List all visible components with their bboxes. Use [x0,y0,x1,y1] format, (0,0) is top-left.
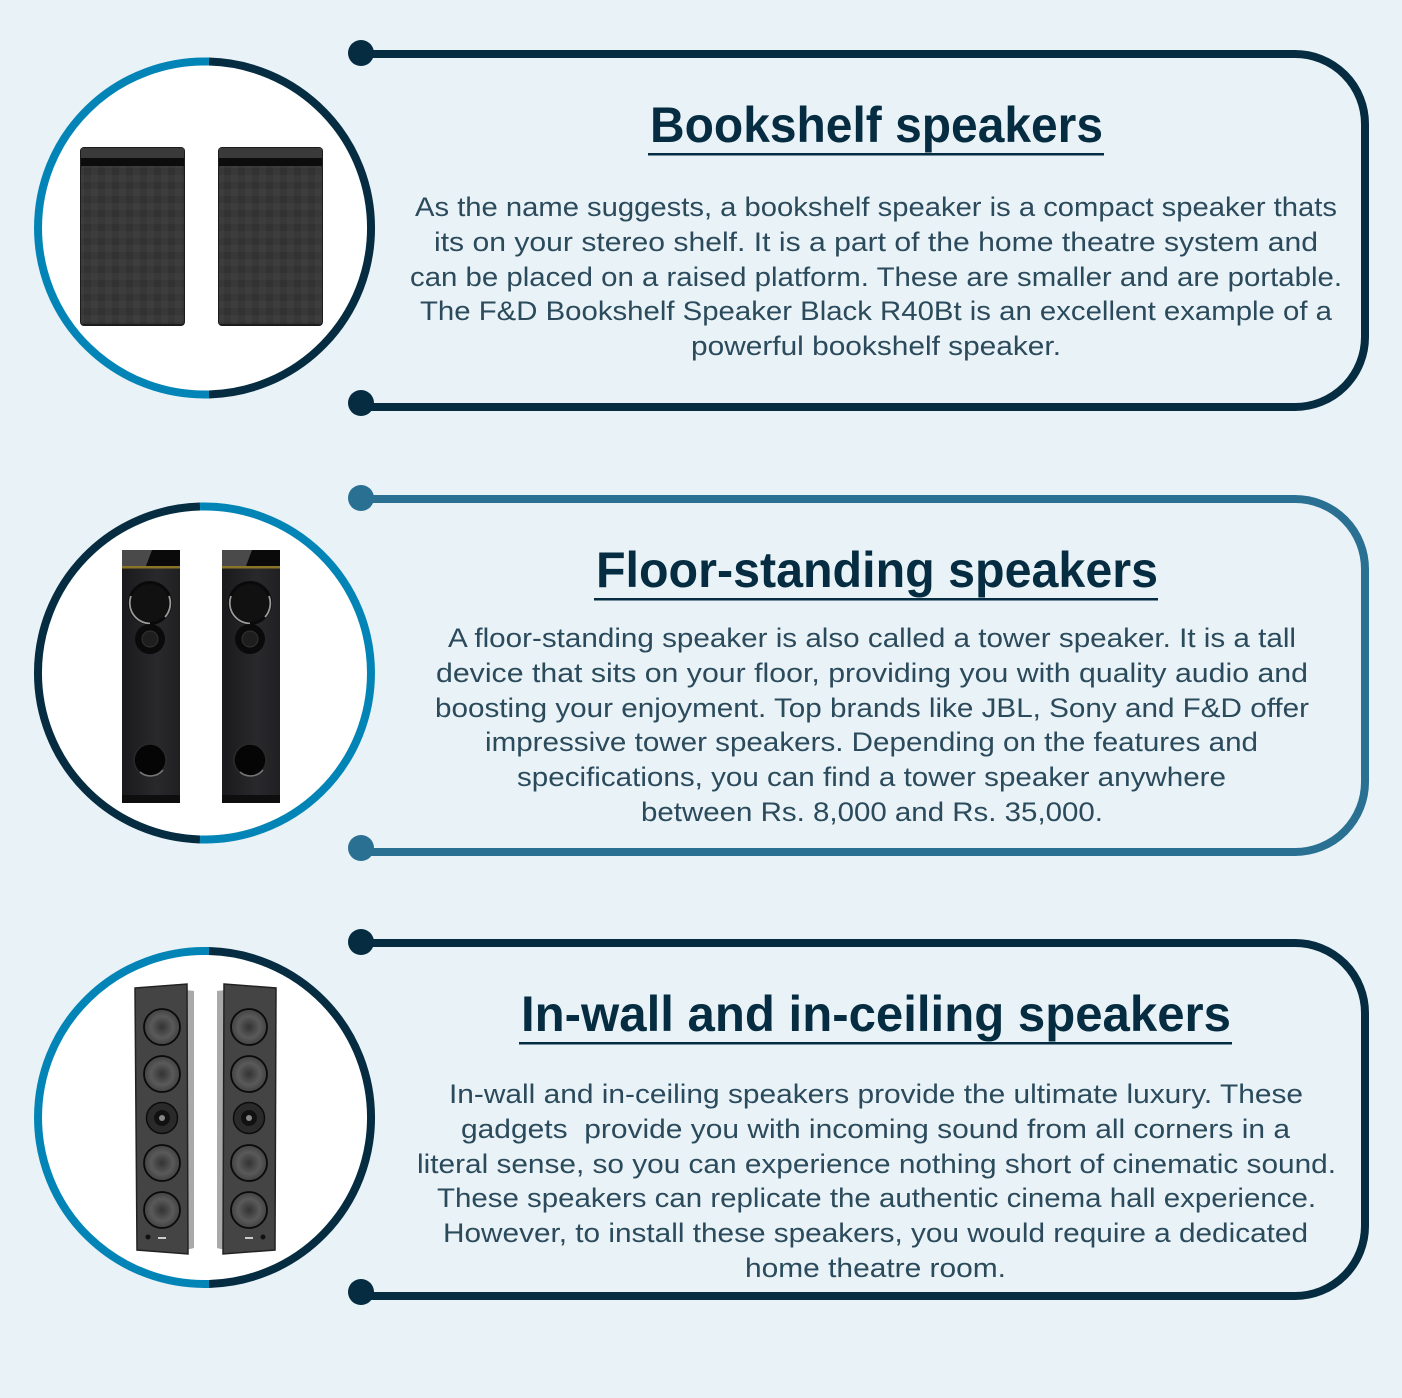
text block: bookshelf description: can be placed on a raised platform. These are smaller and are portable. [410,262,1342,292]
frame: in-wall [348,929,1365,1305]
text block: floor-standing description: impressive tower speakers. Depending on the features and [485,727,1258,757]
icon: right tower speaker [222,550,280,803]
icon: left tower speaker [122,550,180,803]
icon: right bookshelf speaker [218,147,323,326]
text block: bookshelf description [410,192,1342,361]
image circle: bookshelf speakers [38,62,371,394]
icon: right in-wall speaker [217,984,276,1254]
text block: in-wall description: gadgets provide you with incoming sound from all corners in a [461,1114,1291,1144]
image circle: floor-standing speakers [38,506,371,840]
text block: bookshelf description: As the name suggests, a bookshelf speaker is a compact speaker thats [415,192,1337,222]
text block: floor-standing description [435,623,1309,827]
text block: in-wall description: However, to install these speakers, you would require a dedicated [443,1218,1308,1248]
icon: left bookshelf speaker [80,147,185,326]
frame: bookshelf [348,40,1365,416]
heading: floor-standing speakers: Floor-standing speakers [596,542,1158,598]
panel: bookshelf speakers [38,40,1365,416]
text block: in-wall description: In-wall and in-ceiling speakers provide the ultimate luxury. These [449,1079,1303,1109]
text block: floor-standing description: boosting your enjoyment. Top brands like JBL, Sony and F&D offer [435,693,1309,723]
text block: in-wall description: These speakers can replicate the authentic cinema hall experience. [437,1183,1316,1213]
text block: bookshelf description: The F&D Bookshelf Speaker Black R40Bt is an excellent example of a [420,296,1333,326]
text block: in-wall description [417,1079,1336,1283]
image circle: in-wall speakers [38,951,371,1284]
panel: in-wall and in-ceiling speakers [38,929,1365,1305]
text block: floor-standing description: between Rs. 8,000 and Rs. 35,000. [641,797,1103,827]
text block: bookshelf description: its on your stereo shelf. It is a part of the home theatre system and [434,227,1318,257]
text block: in-wall description: literal sense, so you can experience nothing short of cinematic sound. [417,1149,1336,1179]
text block: floor-standing description: A floor-standing speaker is also called a tower speaker. It is a tall [448,623,1296,653]
text block: in-wall description: home theatre room. [745,1253,1006,1283]
text block: floor-standing description: specifications, you can find a tower speaker anywhere [517,762,1226,792]
text block: bookshelf description: powerful bookshelf speaker. [691,331,1061,361]
heading: bookshelf speakers: Bookshelf speakers [650,97,1103,153]
heading: in-wall and in-ceiling speakers: In-wall and in-ceiling speakers [521,986,1231,1042]
frame: floor-standing [348,485,1365,861]
text block: floor-standing description: device that sits on your floor, providing you with quality audio and [436,658,1308,688]
icon: left in-wall speaker [135,984,194,1254]
panel: floor-standing speakers [38,485,1365,861]
